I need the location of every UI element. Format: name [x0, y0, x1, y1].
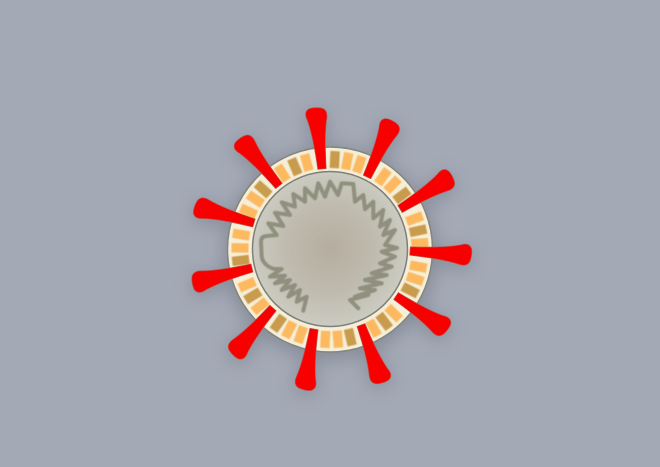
spike 4 [409, 240, 472, 266]
spike 8 [225, 301, 281, 362]
spike 11 [231, 132, 287, 193]
spike 9 [190, 258, 255, 294]
spike 6 [352, 321, 393, 386]
spike 3 [394, 167, 458, 218]
spike 1 [305, 107, 332, 170]
spike 2 [357, 116, 402, 181]
outer envelope ring [228, 147, 432, 352]
drop shadow [190, 111, 472, 396]
spike 10 [192, 196, 257, 234]
spike 5 [390, 287, 453, 339]
spike 7 [294, 327, 325, 392]
envelope protein bars [231, 151, 429, 348]
genome strand [261, 182, 397, 311]
inner core [252, 172, 408, 326]
